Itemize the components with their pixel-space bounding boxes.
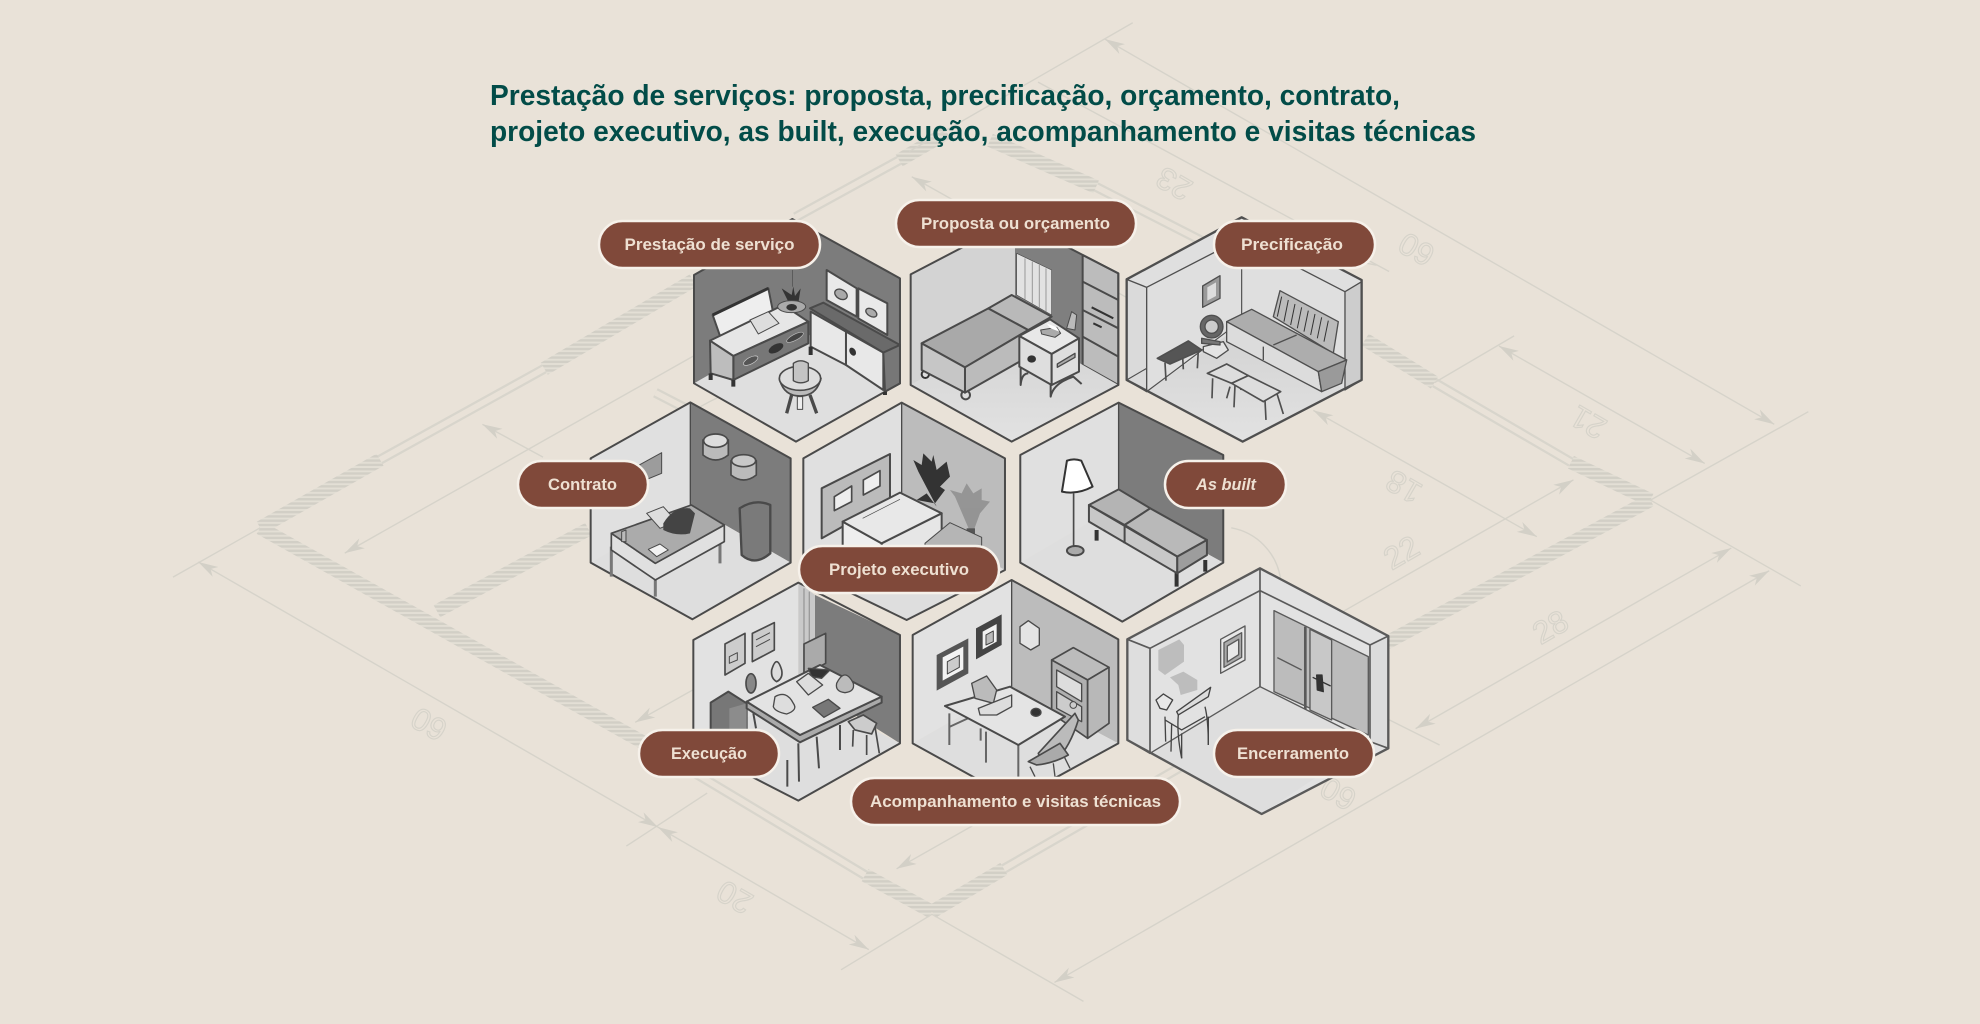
label: Acompanhamento e visitas técnicas — [851, 778, 1180, 825]
dimension numbers: 21 — [1564, 398, 1612, 447]
tall vase — [740, 502, 770, 560]
headboard and windows — [822, 454, 890, 538]
side box — [925, 523, 982, 557]
plant — [778, 287, 806, 313]
desk — [945, 687, 1065, 777]
label: As built: As built — [1195, 475, 1257, 494]
room 3: precificação — [1127, 217, 1362, 442]
filing cabinet — [1052, 648, 1109, 738]
label: Projeto executivo: Projeto executivo — [829, 560, 969, 579]
label: Precificação — [1214, 221, 1375, 268]
label: As built — [1165, 461, 1286, 508]
floor lamp — [1062, 459, 1093, 555]
wall frame — [1221, 626, 1245, 673]
monitor — [804, 633, 826, 675]
room 4: contrato — [591, 402, 791, 619]
cabinet lines — [1083, 282, 1118, 357]
room 8: acompanhamento — [913, 580, 1118, 800]
label: Execução: Execução — [671, 744, 747, 763]
label: Execução — [639, 730, 779, 777]
room 7: execução — [693, 583, 900, 801]
wall cylinders — [703, 434, 756, 480]
hatched walls — [260, 133, 1650, 912]
label: Projeto executivo — [799, 546, 999, 593]
wall art — [937, 614, 1002, 691]
label: Acompanhamento e visitas técnicas: Acompanhamento e visitas técnicas — [870, 792, 1161, 811]
bed — [843, 493, 942, 570]
dimension numbers — [405, 160, 1612, 922]
room 1: prestação de serviço — [694, 219, 900, 442]
wall hexagon shapes — [1158, 639, 1197, 695]
label: Contrato — [518, 461, 648, 508]
dimension numbers: 60 — [1392, 225, 1441, 274]
door — [1274, 611, 1368, 735]
label: Prestação de serviço — [599, 221, 820, 268]
dimension numbers: 28 — [1526, 602, 1574, 651]
label: Encerramento — [1214, 730, 1374, 777]
desk — [611, 505, 724, 597]
curtain — [1017, 253, 1052, 315]
dark cabinet — [711, 692, 747, 740]
plant light — [950, 483, 990, 534]
blueprint floor plan background — [173, 23, 1808, 1001]
label: Encerramento: Encerramento — [1237, 744, 1349, 763]
wall frames — [725, 623, 782, 693]
room 2: proposta ou orçamento — [911, 220, 1118, 442]
room 5: projeto executivo — [803, 403, 1005, 620]
wall frame — [1203, 276, 1220, 307]
dimension lines — [173, 23, 1808, 1001]
label: Proposta ou orçamento: Proposta ou orçamento — [921, 214, 1110, 233]
dark bench — [1157, 341, 1202, 381]
label: Contrato: Contrato — [548, 475, 617, 494]
desk items — [972, 676, 1041, 716]
wall box — [1020, 621, 1039, 650]
dimension numbers: 60 — [405, 700, 453, 749]
title: Prestação de serviços: proposta, precificação, orçamento, contrato, — [490, 80, 1400, 112]
dimension numbers: 60 — [1314, 769, 1362, 818]
dimension numbers: 20 — [710, 873, 759, 922]
title: projeto executivo, as built, execução, acompanhamento e visitas técnicas — [490, 116, 1476, 148]
wall posters — [827, 270, 887, 335]
bed — [922, 295, 1052, 399]
bench — [710, 288, 808, 387]
nightstand — [1019, 319, 1082, 397]
table objects — [773, 668, 854, 717]
chair — [1156, 687, 1211, 758]
plant dark — [913, 453, 950, 507]
office chair — [1028, 713, 1078, 777]
label: Prestação de serviço: Prestação de serviço — [624, 235, 794, 254]
dimension numbers: 23 — [1150, 160, 1198, 208]
cabinets — [810, 303, 900, 395]
stools — [1207, 364, 1283, 420]
room 9: encerramento — [1127, 568, 1388, 814]
label: Precificação: Precificação — [1241, 235, 1343, 254]
wall frame — [639, 453, 662, 480]
stool — [848, 715, 879, 755]
dimension numbers: 22 — [1377, 528, 1425, 577]
dimension numbers: 18 — [1380, 463, 1428, 511]
round side table — [779, 361, 821, 413]
label: Proposta ou orçamento — [896, 200, 1136, 247]
title — [490, 80, 1476, 148]
sofa — [1227, 291, 1347, 392]
dining table — [747, 665, 882, 787]
room 6: as built — [1020, 403, 1223, 622]
fan — [1200, 315, 1228, 358]
sofa — [1089, 489, 1207, 587]
